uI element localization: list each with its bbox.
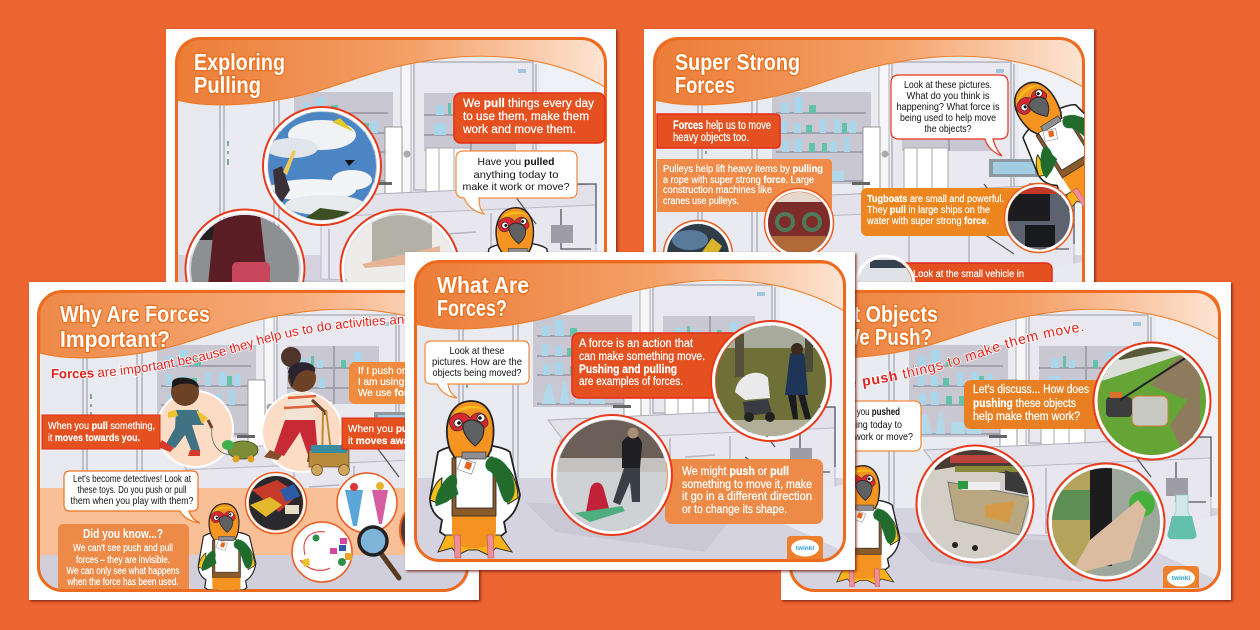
twinkl logo: [787, 536, 823, 559]
heading: Super Strong: [675, 49, 800, 75]
red label: push: When you push something,: [348, 424, 471, 435]
speech bubble: make it work or move?: [823, 431, 913, 443]
boy pulling toy: [158, 378, 232, 456]
frame: [416, 262, 844, 560]
speech bubble: make it work or move?: [462, 181, 570, 193]
orange text box: construction machines like: [663, 185, 772, 196]
orange text box: something to move it, make: [682, 479, 812, 491]
photo ring outer: trolley: [916, 446, 1034, 562]
header banner: [40, 292, 468, 358]
red label: pull: When you pull something,: [48, 421, 160, 432]
red label: push: [342, 418, 471, 449]
photo: suitcase: [191, 215, 299, 282]
speech bubble: being used to help move: [900, 112, 996, 124]
parrot mascot: [430, 401, 520, 558]
photo ring outer: sled: [552, 415, 672, 535]
photo ring outer: hand: [340, 210, 460, 328]
did you know box: We can't see push and pull: [73, 543, 173, 554]
speech bubble: Look at these: [450, 345, 505, 357]
red text box: [657, 114, 780, 148]
frame: [654, 38, 1084, 336]
speech bubble: Let's become detectives! Look at: [73, 473, 191, 485]
parrot mascot: [483, 208, 555, 333]
toy cones photo: [337, 473, 397, 533]
orange text box: I am using force.: [358, 377, 432, 388]
red text box: Pushing and pulling: [579, 364, 677, 376]
red text box: vehicle: [890, 263, 1052, 303]
speech bubble: anything today to: [834, 419, 902, 431]
orange text box: Pulleys help lift heavy items by pulling: [663, 164, 825, 175]
orange text box: pushing these objects: [973, 398, 1084, 410]
photo ring: kites: [265, 109, 379, 223]
photo: flying kites: [268, 112, 376, 220]
speech bubble: these toys. Do you push or pull: [78, 484, 186, 496]
photo ring: pulleys: [766, 190, 832, 256]
frame: [38, 292, 468, 590]
photo: pulleys: [768, 192, 830, 252]
parrot mascot: [831, 466, 900, 587]
orange text box: We might push or pull: [682, 466, 791, 478]
orange text box: [964, 380, 1104, 429]
heading: Why Are Forces: [60, 301, 210, 327]
slide: What Objects Do We Push: [780, 282, 1234, 604]
orange text box: [349, 362, 475, 404]
peach band: [39, 488, 469, 555]
partly hidden photo: [400, 500, 460, 560]
flask: [1168, 495, 1196, 539]
photo: pulling a sled: [557, 420, 667, 530]
twinkl logo: twinkl: [796, 545, 814, 552]
speech bubble: them when you play with them?: [70, 495, 194, 507]
photo ring: tugboat: [1006, 185, 1072, 251]
red text box: to use them, make them: [463, 111, 589, 123]
photo: building bricks: [249, 476, 303, 530]
speech bubble: [456, 151, 577, 214]
frame: [176, 38, 606, 336]
curved guide for text: [51, 322, 460, 378]
orange text box: If I push or pull something,: [358, 366, 475, 377]
red text box: A force is an action that: [579, 338, 694, 350]
heading: Pulling: [194, 72, 261, 98]
beads photo: [292, 522, 352, 582]
photo ring outer: tugboat: [1004, 184, 1074, 252]
red text box: We pull things every day: [463, 98, 592, 110]
orange text box: tugboats: Tugboats are small and powerful.: [867, 194, 1013, 205]
circle behind girl: [262, 392, 342, 472]
photo ring: mower: [1096, 344, 1208, 458]
speech bubble: happening? What force is: [896, 101, 1000, 113]
orange text box: cranes use pulleys.: [663, 196, 739, 207]
orange text box: [657, 159, 832, 212]
red text box: [454, 93, 605, 143]
twinkl logo: twinkl: [1172, 575, 1190, 582]
red text box: are examples of forces.: [579, 376, 683, 388]
red text box: heavy objects too.: [673, 132, 749, 144]
toy turtle: [222, 440, 258, 462]
curved statement: We push things to make them move.: [855, 324, 1084, 390]
photo ring outer: kites: [263, 107, 381, 225]
heading: Exploring: [194, 49, 285, 75]
orange text box: it go in a different direction: [682, 491, 812, 503]
slide: Super Strong Forces: [644, 28, 1098, 282]
photo ring: bricks: [247, 474, 305, 532]
red text box: Forces help us to move: [673, 120, 788, 132]
heading: Forces: [675, 72, 735, 98]
speech bubble: objects being moved?: [432, 367, 522, 379]
photo ring outer: pram: [711, 321, 831, 441]
did you know box: We can only see what happens: [66, 566, 180, 577]
orange text box: a rope with super strong force. Large: [663, 175, 817, 186]
speech bubble: Have you pushed: [836, 406, 909, 418]
orange text box: [665, 459, 823, 524]
slide: Why Are Forces Important: [28, 282, 482, 604]
photo ring: excavator: [665, 222, 731, 288]
parrot mascot: [198, 503, 256, 590]
speech bubble: [425, 341, 529, 398]
photo ring: button: [1050, 466, 1162, 578]
red text box: work and move them.: [462, 124, 576, 136]
slide: Exploring Pulling: [166, 28, 620, 282]
speech bubble: [891, 75, 1008, 156]
speech bubble: [64, 471, 200, 523]
header banner: [416, 263, 844, 329]
photo ring outer: bricks: [246, 472, 306, 534]
photo: pressing button: [1052, 468, 1160, 576]
orange text box: or to change its shape.: [682, 504, 787, 516]
heading: Do We Push?: [812, 324, 932, 350]
red label: pull: [42, 415, 160, 449]
red text box: [572, 333, 744, 398]
photo ring outer: mower: [1094, 342, 1210, 460]
circle behind boy: [157, 391, 233, 467]
red label: pull: it moves towards you.: [48, 433, 151, 444]
red text box: can make something move.: [579, 351, 705, 363]
heading: Forces?: [437, 295, 507, 321]
orange text box: tugboats: [861, 188, 1026, 236]
orange text box: help make them work?: [973, 411, 1080, 423]
orange text box: Let's discuss... How does: [973, 384, 1089, 396]
speech bubble: Have you pulled: [478, 156, 555, 168]
photo: hand pulling: [347, 215, 440, 282]
photo ring: suitcase: [187, 211, 303, 327]
photo: excavator: [667, 224, 729, 252]
speech bubble: pictures. How are the: [432, 356, 522, 368]
speech bubble: anything today to: [474, 169, 559, 181]
photo: shopping trolley: [921, 450, 1029, 558]
photo ring: hand: [342, 211, 458, 327]
photo ring outer: pulleys: [764, 188, 834, 258]
photo ring: trolley: [918, 448, 1032, 560]
photo: small vehicle: [858, 258, 912, 282]
magnifying glass: [359, 527, 399, 578]
did you know box: when the force has been used.: [67, 577, 178, 588]
did you know box: [58, 524, 189, 589]
orange text box: tugboats: They pull in large ships on the: [867, 205, 998, 216]
heading: What Objects: [812, 301, 938, 327]
slide: What Are Forces: [405, 252, 855, 570]
curved guide for text: [836, 329, 1095, 389]
red label: push: it moves away from you.: [348, 436, 463, 447]
grey floor: [39, 555, 469, 590]
photo ring outer: button: [1048, 464, 1164, 580]
twinkl logo: [1163, 566, 1199, 588]
did you know box: forces – they are invisible.: [76, 555, 170, 566]
heading: What Are: [437, 272, 529, 298]
header banner: [655, 39, 1083, 105]
photo ring: pram: [713, 323, 829, 439]
speech bubble: Look at these pictures.: [904, 79, 992, 91]
speech bubble: What do you think is: [906, 90, 990, 102]
heading: Important?: [60, 326, 170, 352]
photo ring: sled: [554, 417, 670, 533]
photo ring: small vehicle: [856, 256, 914, 314]
parrot mascot leaning in: [1014, 82, 1084, 211]
girl pushing cart: [264, 347, 350, 476]
speech bubble: the objects?: [924, 123, 972, 135]
orange text box: tugboats: water with super strong force.: [867, 216, 989, 227]
photo: lawn mower: [1098, 347, 1206, 455]
orange text box: We use force every day.: [358, 388, 467, 399]
did you know box: Did you know...?: [83, 526, 163, 541]
red text box: vehicle: Look at the small vehicle in: [913, 269, 1024, 280]
photo: pushing a pram: [716, 326, 826, 436]
photo: tugboat: [1008, 187, 1070, 249]
photo ring outer: suitcase: [186, 210, 304, 328]
frame: [790, 292, 1220, 590]
header banner: [792, 292, 1220, 358]
header banner: [177, 39, 605, 105]
photo ring outer: excavator: [664, 220, 732, 290]
speech bubble: [815, 401, 921, 463]
